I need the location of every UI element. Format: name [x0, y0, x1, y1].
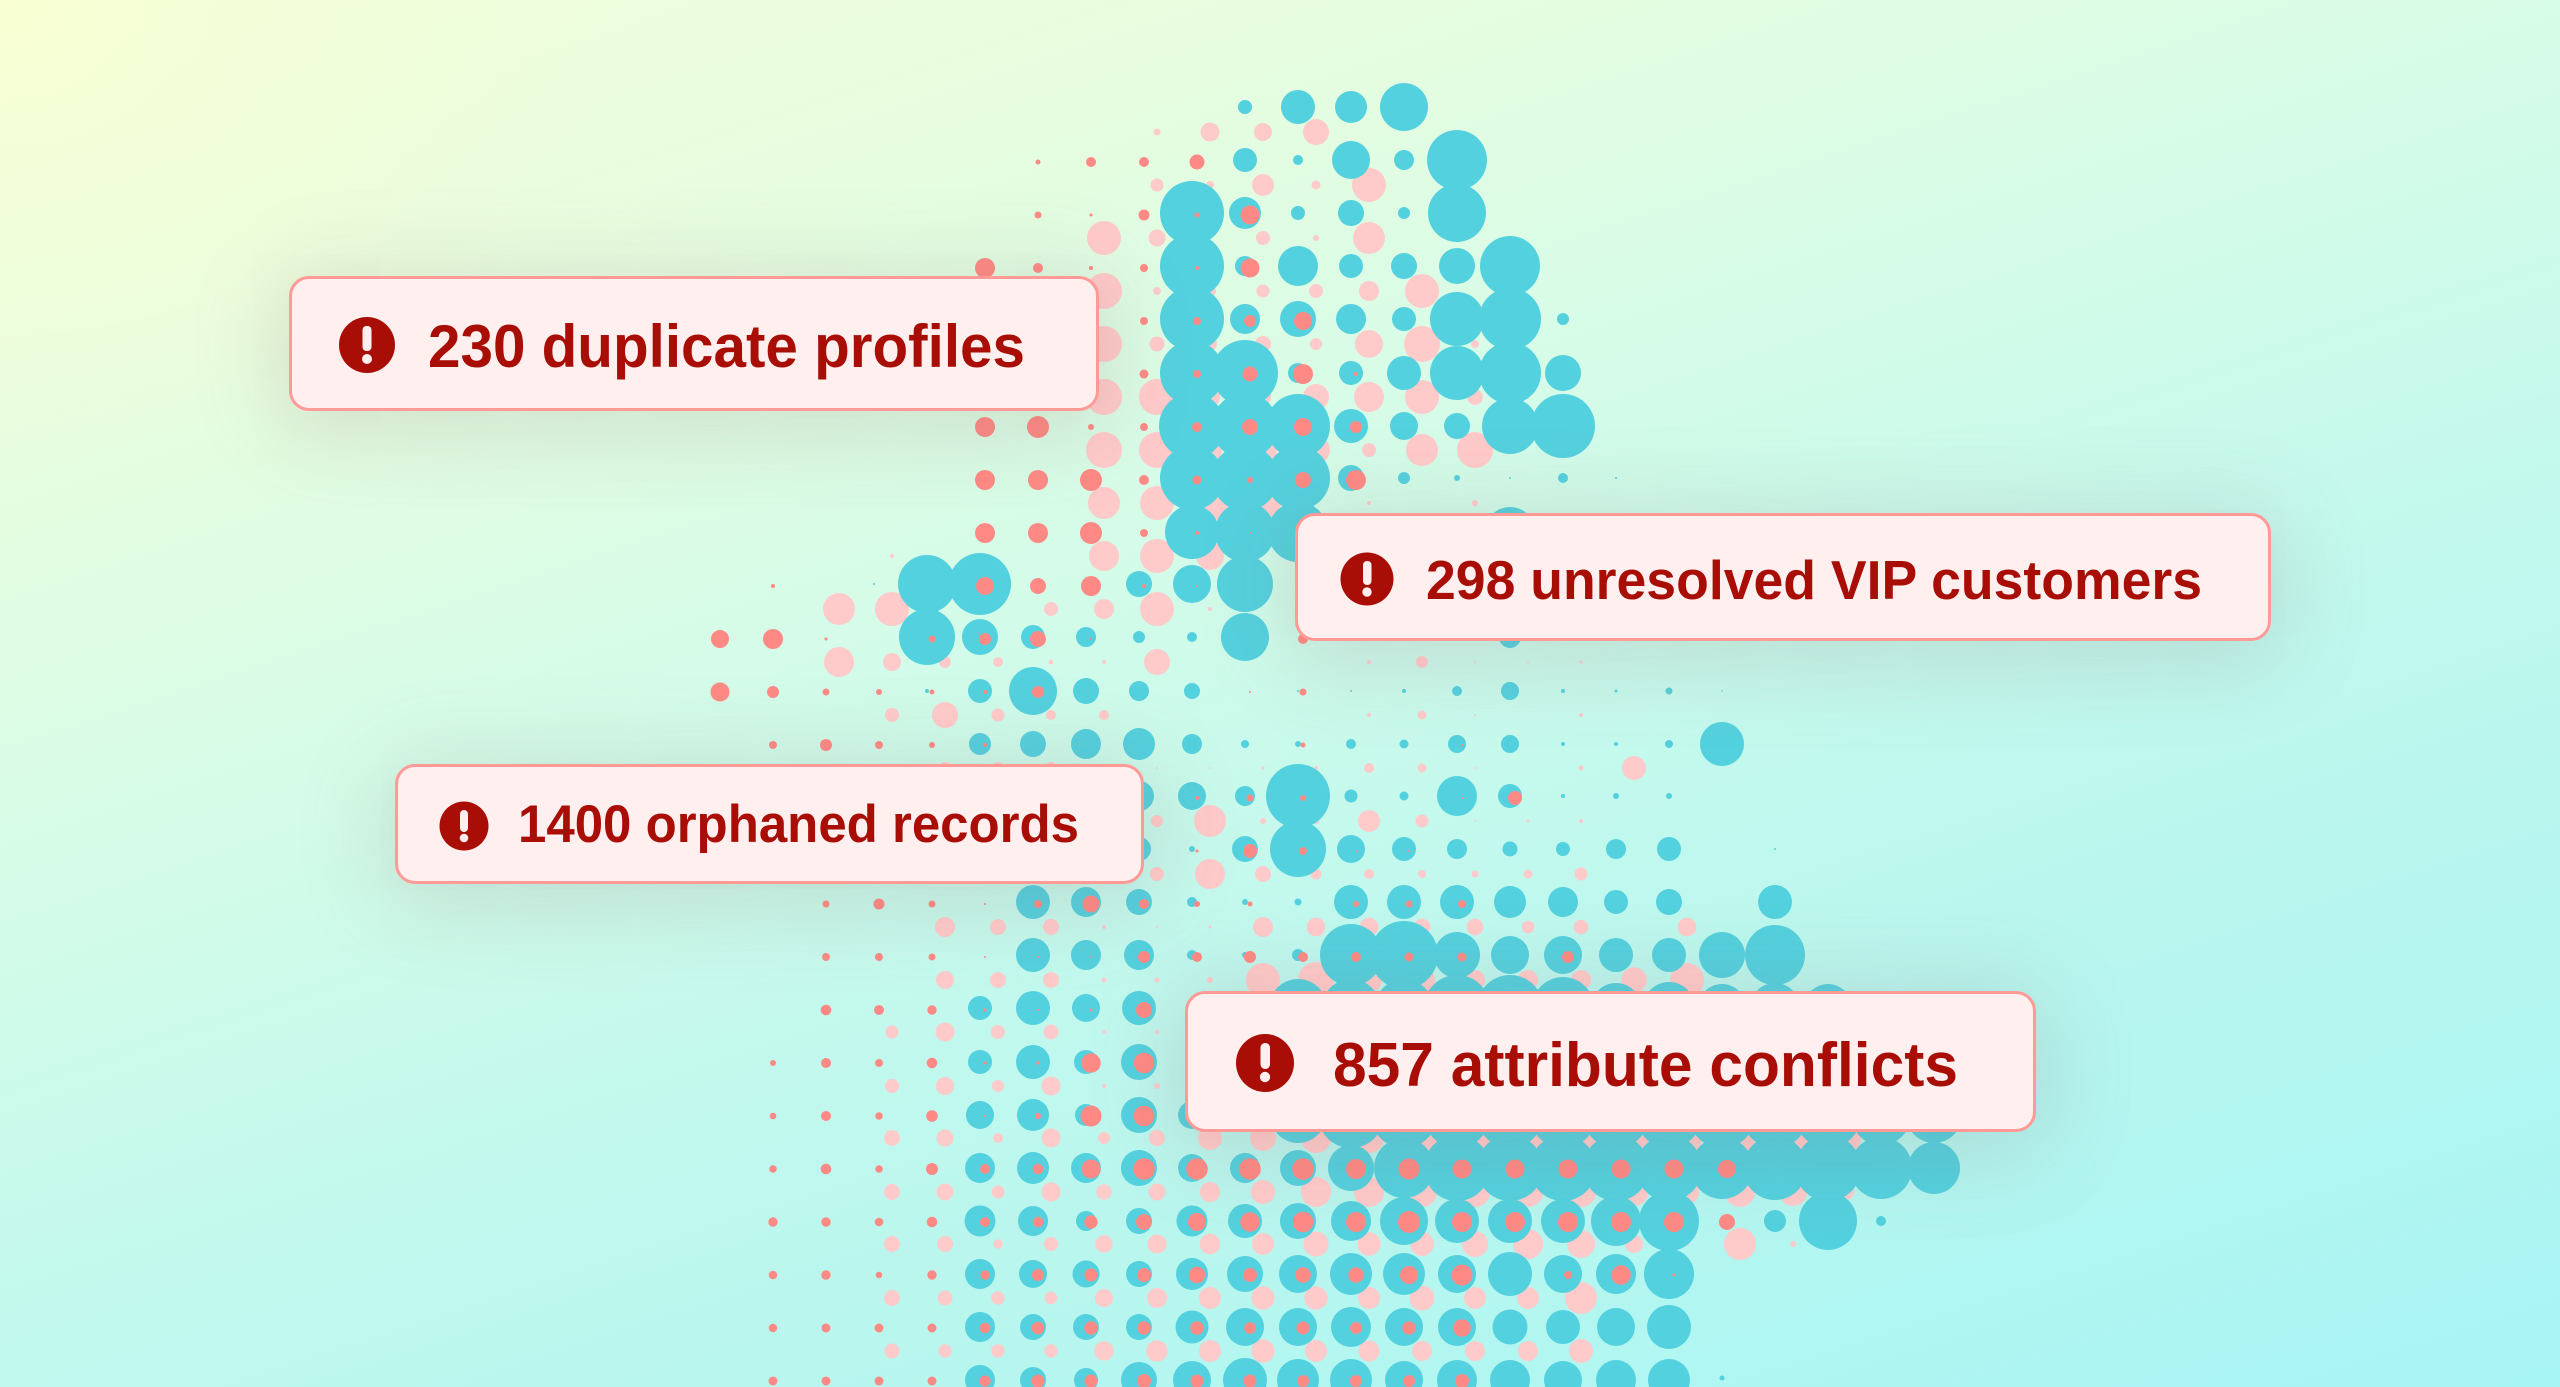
callout: 298 unresolved VIP customers	[1295, 513, 2271, 641]
callout: 857 attribute conflicts	[1185, 991, 2036, 1132]
pink dots layer	[823, 119, 1861, 1363]
label text: 298 unresolved VIP customers	[1426, 549, 2202, 611]
icon: alert	[339, 317, 395, 373]
label text: 857 attribute conflicts	[1333, 1031, 1958, 1100]
callout: 230 duplicate profiles	[289, 276, 1099, 411]
cyan dots layer	[873, 83, 1962, 1387]
label text: 1400 orphaned records	[518, 795, 1079, 854]
label text: 230 duplicate profiles	[428, 313, 1025, 380]
red dots layer	[710, 154, 1736, 1387]
callout: 1400 orphaned records	[395, 764, 1144, 884]
icon: alert	[440, 802, 488, 850]
icon: alert	[1340, 552, 1394, 606]
icon: alert	[1236, 1034, 1294, 1092]
